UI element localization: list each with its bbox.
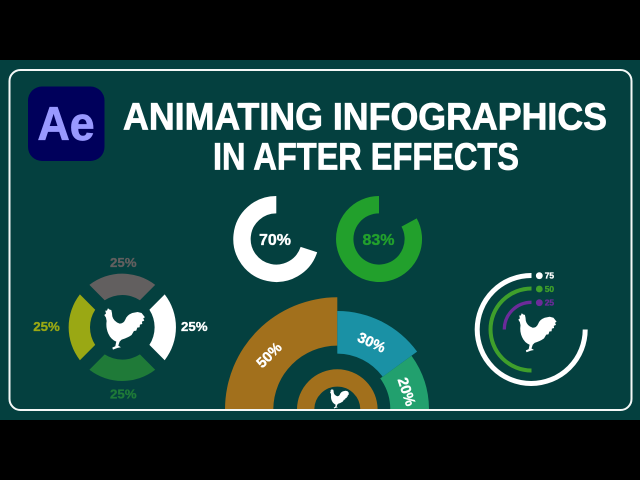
title: IN AFTER EFFECTS: [213, 136, 519, 178]
legend: 50: 50: [545, 284, 554, 294]
label: 50%: 50%: [254, 340, 286, 372]
arc: green 50: [491, 288, 532, 370]
segment: teal 30%: [337, 311, 417, 377]
segment: white right: [149, 294, 176, 360]
icon: After Effects logo: [28, 86, 104, 161]
semicircle chart: [225, 297, 429, 410]
donut chart: 70%: [242, 205, 309, 273]
label: 30%: 30%: [355, 330, 388, 357]
legend: 75: 75: [545, 271, 554, 281]
segment: grey top: [89, 274, 155, 300]
label: 20%: 20%: [394, 376, 418, 408]
donut chart: 83%: [345, 205, 413, 273]
label: 25% bottom: 25%: [110, 386, 137, 402]
segment: green 20%: [380, 356, 429, 410]
icon: rooster: [518, 313, 557, 352]
title: [123, 96, 607, 178]
label: 25% left: 25%: [33, 319, 60, 334]
arc: purple 25: [504, 302, 532, 330]
icon: After Effects logo: Ae: [38, 97, 94, 150]
donut chart: 83%: 83%: [362, 232, 395, 249]
segment: brown 50%: [225, 297, 337, 410]
arc: white 75: [477, 275, 585, 383]
inner brown ring: [306, 378, 369, 410]
label: 25% top: 25%: [110, 255, 137, 270]
segment: olive left: [69, 294, 95, 360]
radial bar chart: [477, 271, 585, 383]
frame border: [10, 70, 632, 410]
title: ANIMATING INFOGRAPHICS: [123, 96, 607, 138]
quadrant ring chart: [33, 255, 208, 402]
icon: rooster: [104, 308, 145, 350]
segment: green bottom: [89, 354, 155, 381]
label: 25% right: 25%: [181, 319, 208, 334]
legend: 25: 25: [545, 298, 554, 308]
icon: rooster: [330, 389, 349, 408]
frame bottom edge over chart: [20, 409, 620, 411]
donut chart: 70%: 70%: [259, 232, 291, 249]
